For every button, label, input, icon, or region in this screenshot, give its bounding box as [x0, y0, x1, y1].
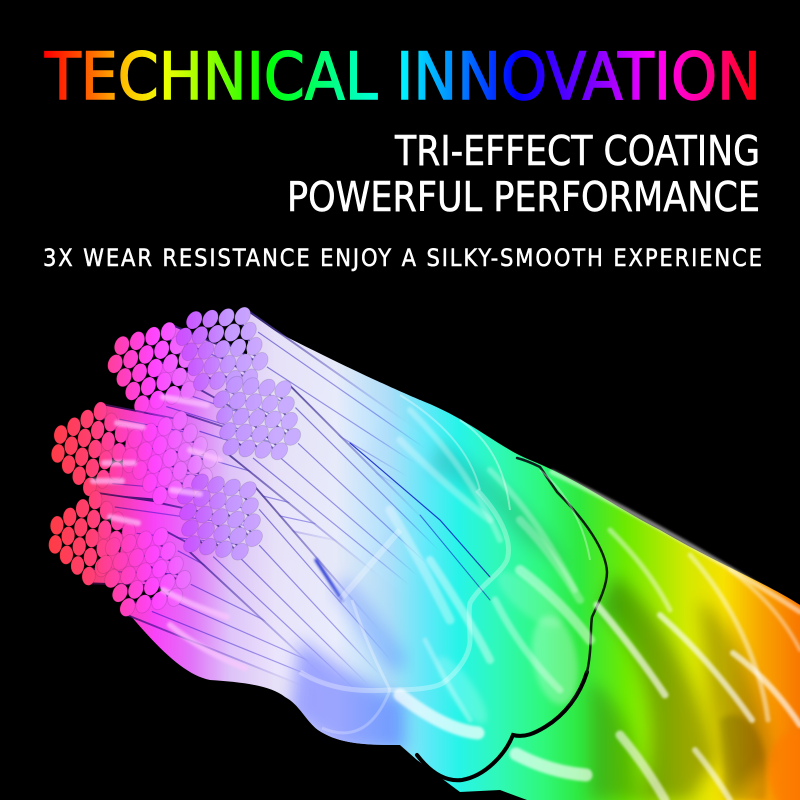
- strand bundle C: [95, 307, 435, 510]
- strand bundle D: [113, 399, 454, 577]
- strand bundle E: [46, 396, 359, 532]
- strand bundle G: [45, 487, 355, 608]
- lower periwinkle sleeve tone: [290, 640, 405, 750]
- cable base shape and strands: [130, 318, 800, 800]
- rainbow tint overlay: [0, 290, 800, 800]
- strand bundle H: [82, 509, 419, 735]
- strand bundle B: [190, 351, 498, 642]
- strand bundle A: [157, 284, 486, 539]
- sleeve cuff gap: [417, 458, 607, 780]
- tagline: 3X WEAR RESISTANCE ENJOY A SILKY-SMOOTH EXPERIENCE: [43, 245, 762, 272]
- pale lobe blobs: [429, 564, 584, 730]
- orange end glow: [768, 732, 800, 800]
- strand bundle F: [153, 450, 450, 753]
- artwork: braided rainbow cable: [48, 307, 800, 800]
- sleeve rings: [300, 395, 590, 733]
- subtitle: two-line white heading: [287, 127, 760, 221]
- translucent sleeve strands: [390, 410, 580, 720]
- pink fiber highlights: [93, 397, 245, 668]
- rear rope shading: [430, 440, 770, 800]
- bright streaks over the sleeves: [400, 472, 800, 800]
- blue shadow between strand groups: [316, 443, 490, 660]
